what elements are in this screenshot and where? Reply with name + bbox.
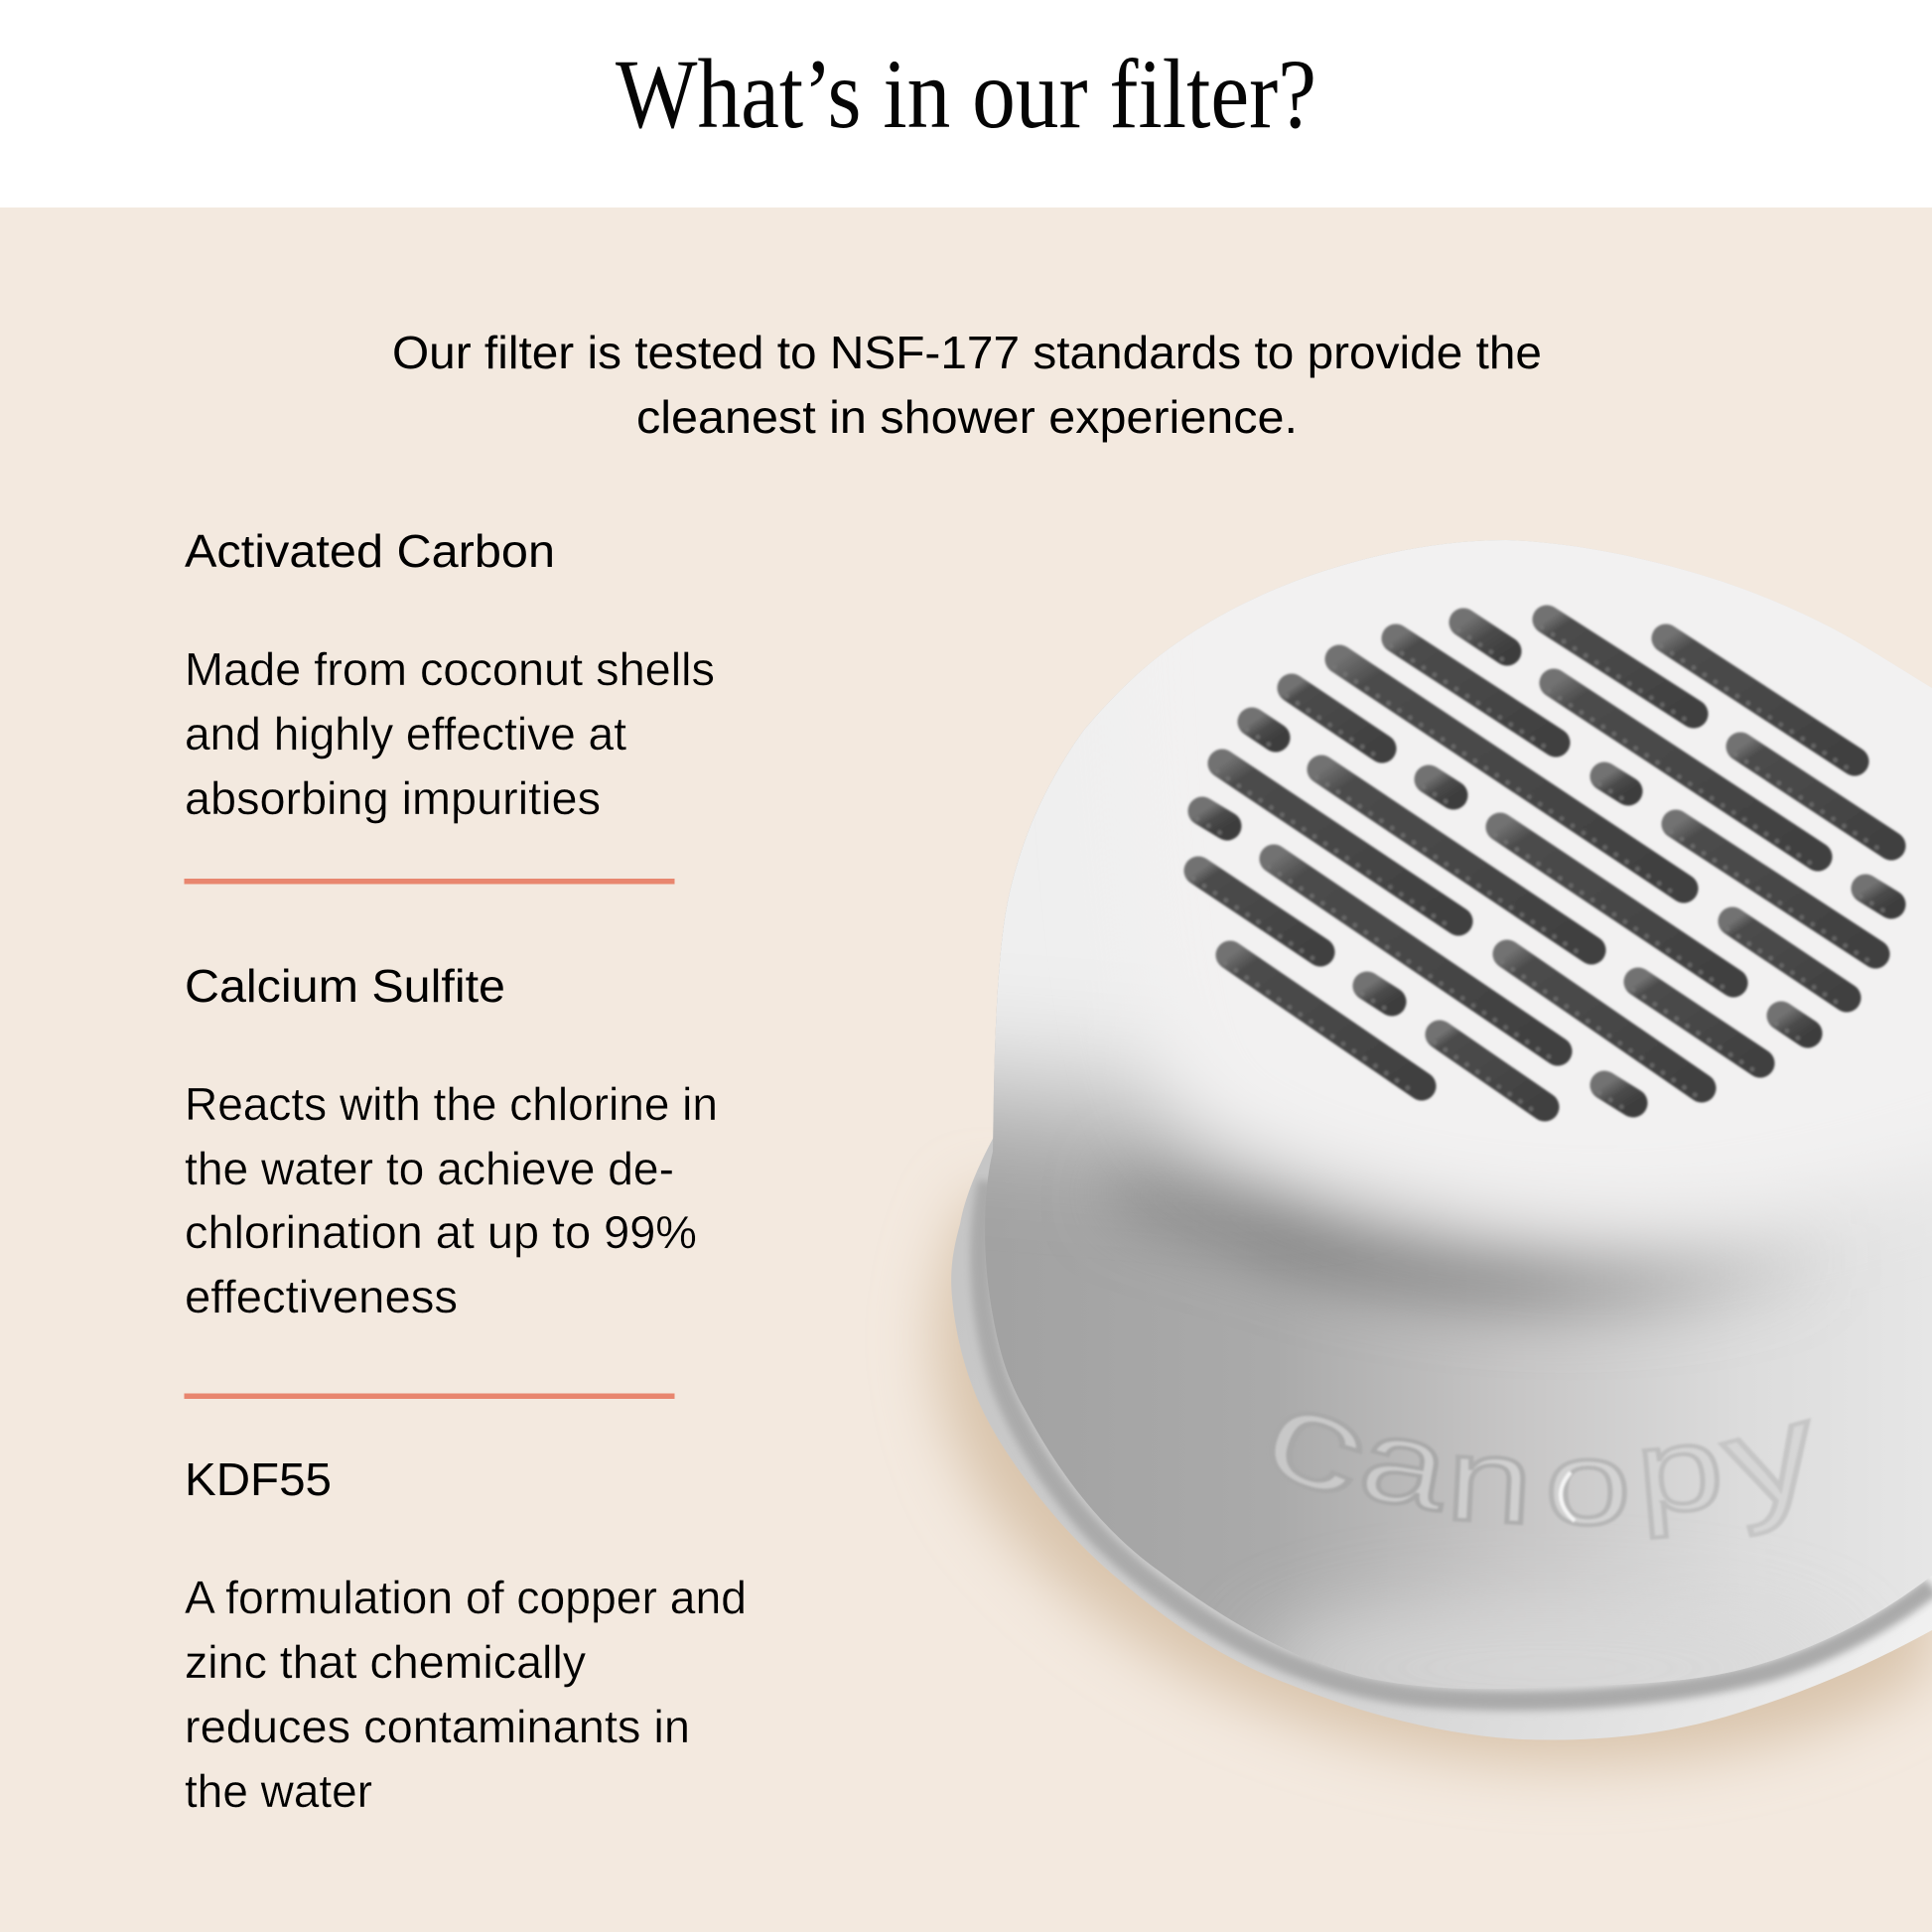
heading: KDF55: KDF55	[185, 1453, 332, 1505]
heading: calcium sulfite: Calcium Sulfite	[185, 960, 505, 1012]
ingredient: calcium sulfite	[185, 960, 718, 1322]
body lower highlight	[1257, 1587, 1620, 1689]
description: KDF55: reduces contaminants in	[185, 1701, 690, 1752]
description: calcium sulfite	[185, 1078, 718, 1322]
left soft light	[989, 582, 1295, 1195]
shoulder shadow	[1112, 1181, 1837, 1279]
intro text	[392, 327, 1542, 443]
canopy logo: n	[1444, 1412, 1536, 1549]
description: activated carbon: absorbing impurities	[185, 772, 601, 824]
description: calcium sulfite: the water to achieve de-	[185, 1143, 674, 1194]
intro text: cleanest in shower experience.	[636, 391, 1298, 443]
filter holes grid	[1193, 620, 1891, 1115]
top dome	[1139, 540, 1932, 1279]
ingredient: KDF55	[185, 1453, 747, 1817]
description: KDF55: the water	[185, 1765, 372, 1817]
description: KDF55	[185, 1572, 747, 1817]
canopy logo: a	[1351, 1391, 1459, 1537]
description: calcium sulfite: chlorination at up to 99%	[185, 1206, 697, 1258]
flange groove	[980, 1181, 1932, 1701]
cartridge body	[985, 540, 1932, 1689]
description: calcium sulfite: Reacts with the chlorine in	[185, 1078, 718, 1130]
canopy logo: o	[1545, 1417, 1631, 1550]
description: activated carbon	[185, 643, 715, 824]
product: canopy filter cartridge	[908, 540, 1932, 1791]
heading: activated carbon: Activated Carbon	[185, 525, 555, 577]
title: What’s in our filter?	[616, 39, 1316, 149]
ingredient: activated carbon	[185, 525, 715, 824]
description: KDF55: A formulation of copper and	[185, 1572, 747, 1623]
canopy logo: y	[1709, 1374, 1833, 1538]
header band	[0, 0, 1932, 207]
canopy logo: p	[1631, 1400, 1728, 1540]
canopy logo: c	[1245, 1354, 1389, 1528]
description: activated carbon: and highly effective at	[185, 708, 626, 759]
flange lip	[951, 688, 1932, 1740]
description: activated carbon: Made from coconut shells	[185, 643, 715, 695]
description: KDF55: zinc that chemically	[185, 1636, 586, 1688]
intro text: Our filter is tested to NSF-177 standards to provide the	[392, 327, 1542, 378]
description: calcium sulfite: effectiveness	[185, 1271, 458, 1322]
ground shadow	[935, 1191, 1932, 1763]
canopy logo	[1245, 1354, 1833, 1550]
